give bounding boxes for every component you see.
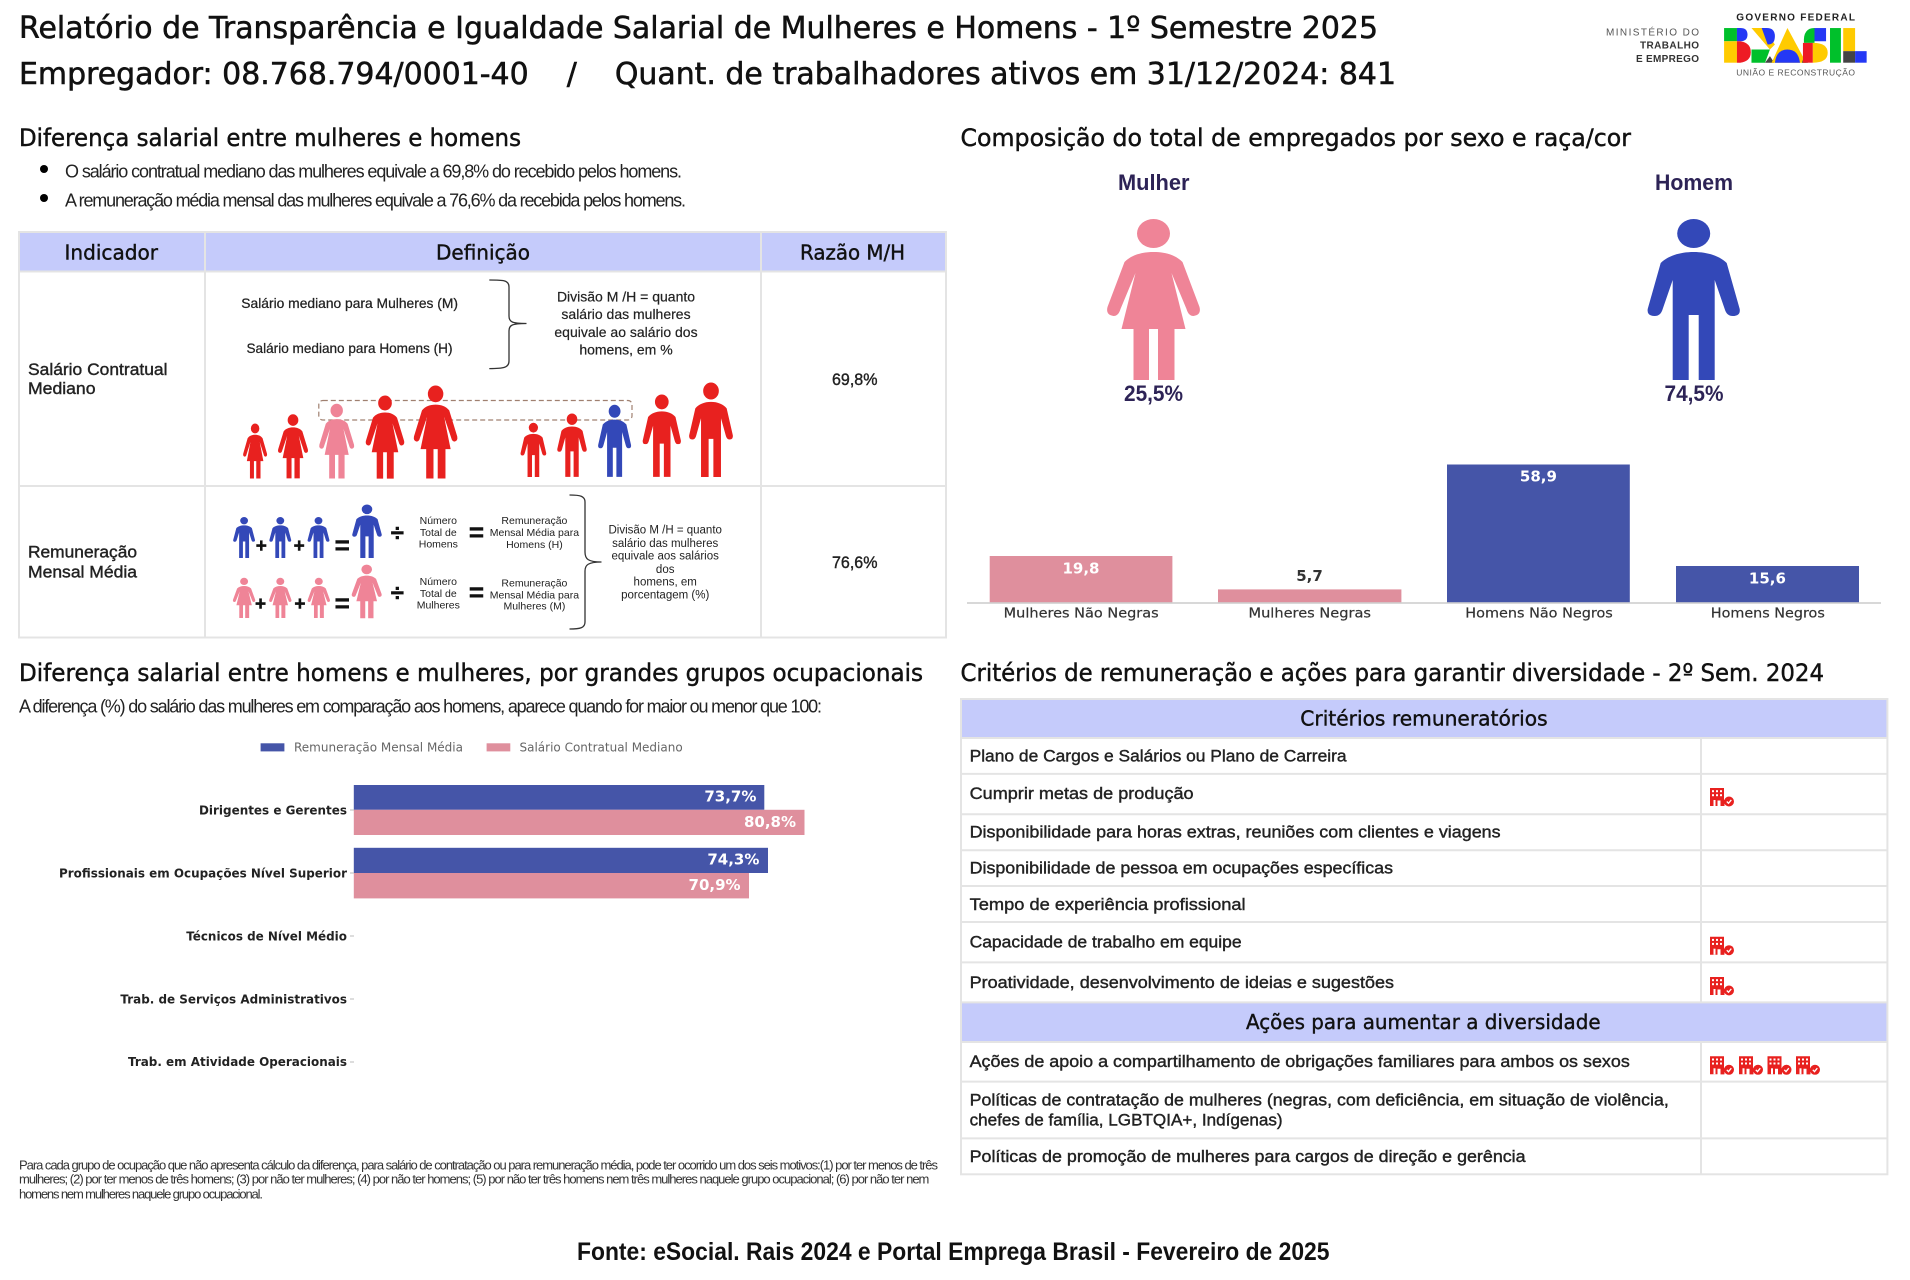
definition: remuneração média homens: ÷ bbox=[391, 520, 404, 547]
definition: remuneração média mulheres: ÷ bbox=[391, 580, 404, 607]
source line: Fonte: eSocial. Rais 2024 e Portal Emprega Brasil - Fevereiro de 2025 bbox=[577, 1238, 1330, 1266]
table header bbox=[64, 240, 905, 264]
row label: Salário Contratual Mediano: Salário Contratual bbox=[28, 360, 168, 379]
bullet list bbox=[40, 162, 686, 210]
bar chart: grupos ocupacionais: Técnicos de Nível Médio bbox=[186, 928, 347, 943]
bar chart: sexo e raça/cor: 19,8 bbox=[1062, 560, 1100, 578]
definition: remuneração média mulheres: dos bbox=[656, 564, 675, 576]
bar chart: sexo e raça/cor: Homens Não Negros bbox=[1465, 606, 1613, 622]
criteria rows: Plano de Cargos e Salários ou Plano de Carreira bbox=[970, 747, 1347, 766]
definition: remuneração média mulheres: salário das mulheres bbox=[612, 538, 719, 550]
pictogram: homem 74,5% bbox=[1648, 170, 1740, 406]
definition: remuneração média homens: Mensal Média para bbox=[490, 527, 579, 539]
action rows: Políticas de promoção de mulheres para cargos de direção e gerência bbox=[970, 1147, 1526, 1166]
bar chart: sexo e raça/cor: 58,9 bbox=[1520, 468, 1557, 486]
action rows: chefes de família, LGBTQIA+, Indígenas) bbox=[970, 1111, 1283, 1130]
definition: remuneração média homens: + bbox=[294, 536, 305, 557]
icons: ações bbox=[1710, 1056, 1820, 1075]
panel: critérios e ações bbox=[960, 0, 1887, 1174]
definition: remuneração média mulheres: Divisão M /H = quanto bbox=[608, 524, 722, 536]
definition: remuneração média mulheres: homens, em bbox=[634, 577, 697, 589]
definition: remuneração média mulheres: Mulheres (M) bbox=[503, 600, 565, 612]
pictogram: mulher 25,5%: Mulher bbox=[1118, 170, 1190, 195]
figures: distribuição mediana bbox=[243, 382, 733, 479]
value: 76,6%: 76,6% bbox=[832, 553, 878, 572]
definition: remuneração média homens: Total de bbox=[420, 527, 457, 539]
bar chart: grupos ocupacionais: 70,9% bbox=[689, 876, 741, 894]
bullet list: O salário contratual mediano das mulheres equivale a 69,8% do recebido pelos homens. bbox=[65, 162, 682, 182]
legend: Salário Contratual Mediano bbox=[520, 740, 683, 754]
definition: salário mediano: Salário mediano para Homens (H) bbox=[246, 340, 452, 356]
definition: salário mediano: Divisão M /H = quanto bbox=[557, 288, 695, 304]
definition: remuneração média homens: Número bbox=[420, 515, 457, 527]
definition: salário mediano bbox=[241, 280, 698, 369]
row label: Remuneração Mensal Média bbox=[28, 542, 138, 582]
panel: diferença salarial bbox=[19, 124, 946, 638]
panel: composição bbox=[960, 124, 1881, 622]
table header: Razão M/H bbox=[800, 240, 905, 264]
definition: remuneração média homens: Homens (H) bbox=[506, 539, 563, 551]
footnote: Para cada grupo de ocupação que não apresenta cálculo da diferença, para salário de contratação ou para remuneração média, pode ter ocorrido um dos seis motivos:(1) por ter menos de três bbox=[19, 1157, 938, 1172]
definition: remuneração média mulheres: Número bbox=[420, 576, 457, 588]
definition: salário mediano: Salário mediano para Mulheres (M) bbox=[241, 295, 458, 311]
definition: remuneração média homens: = bbox=[335, 530, 350, 560]
logo: Governo Federal Brasil bbox=[1724, 12, 1867, 78]
legend: Remuneração Mensal Média bbox=[294, 740, 463, 754]
action rows: Políticas de contratação de mulheres (negras, com deficiência, em situação de violência, bbox=[970, 1091, 1669, 1110]
criteria rows: Capacidade de trabalho em equipe bbox=[970, 932, 1242, 951]
footnote: mulheres; (2) por ter menos de três homens; (3) por não ter mulheres; (4) por não ter homens; (5) por não ter três homens nem três mulheres naquele grupo ocupacional; (6) por não ter nem bbox=[19, 1172, 929, 1187]
definition: remuneração média mulheres bbox=[233, 495, 722, 629]
definition: remuneração média mulheres: Mulheres bbox=[417, 600, 460, 612]
table: critérios remuneratórios e ações bbox=[961, 0, 1887, 1174]
criteria rows: Cumprir metas de produção bbox=[970, 784, 1194, 803]
pictogram: mulher 25,5%: 25,5% bbox=[1124, 381, 1183, 406]
bar chart: grupos ocupacionais: 73,7% bbox=[704, 788, 756, 806]
definition: remuneração média homens: = bbox=[469, 517, 484, 547]
pictogram: mulher 25,5% bbox=[1107, 170, 1200, 406]
header: critérios remuneratórios: Critérios remuneratórios bbox=[1300, 706, 1548, 730]
row label: Remuneração Mensal Média: Mensal Média bbox=[28, 562, 138, 582]
definition: remuneração média mulheres: Remuneração bbox=[501, 578, 568, 590]
row label: Remuneração Mensal Média: Remuneração bbox=[28, 542, 137, 562]
bar chart: grupos ocupacionais: 74,3% bbox=[707, 850, 759, 868]
bar chart: sexo e raça/cor: Mulheres Não Negras bbox=[1004, 606, 1159, 622]
logo: Governo Federal Brasil: UNIÃO E RECONSTRUÇÃO bbox=[1736, 68, 1855, 78]
definition: remuneração média homens: + bbox=[256, 536, 267, 557]
criteria rows: Disponibilidade de pessoa em ocupações específicas bbox=[970, 858, 1393, 878]
logo: Governo Federal Brasil: GOVERNO FEDERAL bbox=[1736, 12, 1855, 24]
title: Relatório de Transparência e Igualdade Salarial de Mulheres e Homens - 1º Semestre 2025 bbox=[19, 11, 1378, 46]
definition: remuneração média mulheres: + bbox=[255, 594, 266, 615]
heading: composição: Composição do total de empregados por sexo e raça/cor bbox=[960, 124, 1631, 152]
heading: diferença salarial: Diferença salarial entre mulheres e homens bbox=[19, 124, 521, 152]
bar chart: sexo e raça/cor bbox=[967, 464, 1881, 622]
bar chart: grupos ocupacionais: Dirigentes e Gerentes bbox=[199, 803, 347, 818]
table: indicadores bbox=[19, 232, 946, 638]
heading: critérios: Critérios de remuneração e ações para garantir diversidade - 2º Sem. 2024 bbox=[960, 659, 1824, 687]
header: ações: Ações para aumentar a diversidade bbox=[1246, 1010, 1601, 1034]
bar chart: sexo e raça/cor: 15,6 bbox=[1749, 570, 1786, 588]
bar chart: grupos ocupacionais: Trab. de Serviços Administrativos bbox=[120, 991, 347, 1006]
footnote bbox=[19, 1157, 938, 1201]
definition: remuneração média mulheres: equivale aos salários bbox=[611, 550, 719, 562]
definition: remuneração média mulheres: Total de bbox=[420, 588, 457, 600]
bullet list: A remuneração média mensal das mulheres equivale a 76,6% da recebida pelos homens. bbox=[65, 190, 686, 210]
logo: Ministério do Trabalho e Emprego bbox=[1606, 25, 1699, 65]
row label: Salário Contratual Mediano: Mediano bbox=[28, 379, 96, 398]
definition: remuneração média mulheres: porcentagem (%) bbox=[621, 590, 709, 602]
title: Empregador: 08.768.794/0001-40 / Quant. de trabalhadores ativos em 31/12/2024: 841 bbox=[19, 57, 1396, 92]
logo: Ministério do Trabalho e Emprego: TRABALHO bbox=[1640, 40, 1699, 52]
value: 69,8%: 69,8% bbox=[832, 370, 878, 389]
footnote: homens nem mulheres naquele grupo ocupacional. bbox=[19, 1186, 263, 1201]
definition: remuneração média homens: Remuneração bbox=[501, 515, 568, 527]
bar chart: grupos ocupacionais: Trab. em Atividade Operacionais bbox=[128, 1054, 347, 1069]
bar chart: sexo e raça/cor: 5,7 bbox=[1296, 567, 1323, 585]
definition: remuneração média homens bbox=[233, 504, 579, 560]
table header: Indicador bbox=[64, 240, 159, 264]
bar chart: sexo e raça/cor: Homens Negros bbox=[1711, 606, 1825, 622]
bar chart: grupos ocupacionais: Profissionais em Ocupações Nível Superior bbox=[59, 866, 348, 881]
definition: remuneração média mulheres: Mensal Média para bbox=[490, 590, 579, 602]
criteria rows: Proatividade, desenvolvimento de ideias e sugestões bbox=[970, 973, 1394, 992]
definition: salário mediano: equivale ao salário dos bbox=[554, 324, 698, 340]
pictogram: homem 74,5%: Homem bbox=[1655, 170, 1733, 195]
action rows bbox=[970, 1052, 1669, 1166]
definition: remuneração média homens: Homens bbox=[419, 539, 458, 551]
panel: grupos ocupacionais bbox=[19, 659, 938, 1201]
bar chart: sexo e raça/cor: Mulheres Negras bbox=[1248, 606, 1371, 622]
definition: remuneração média mulheres: = bbox=[335, 588, 350, 618]
definition: remuneração média mulheres: = bbox=[469, 577, 484, 607]
icons: critérios bbox=[1710, 788, 1734, 996]
criteria rows: Disponibilidade para horas extras, reuniões com clientes e viagens bbox=[970, 823, 1501, 842]
logo: Ministério do Trabalho e Emprego: MINISTÉRIO DO bbox=[1606, 25, 1699, 38]
criteria rows: Tempo de experiência profissional bbox=[970, 895, 1246, 914]
row label: Salário Contratual Mediano bbox=[28, 360, 168, 398]
pictogram: homem 74,5%: 74,5% bbox=[1664, 381, 1724, 406]
criteria rows bbox=[970, 747, 1501, 992]
definition: remuneração média mulheres: + bbox=[294, 594, 305, 615]
logo: Ministério do Trabalho e Emprego: E EMPREGO bbox=[1636, 54, 1699, 65]
action rows: Ações de apoio a compartilhamento de obrigações familiares para ambos os sexos bbox=[970, 1052, 1630, 1071]
heading: grupos ocupacionais: Diferença salarial entre homens e mulheres, por grandes grupos ocupacionais bbox=[19, 659, 923, 687]
title bbox=[19, 11, 1396, 92]
bar chart: grupos ocupacionais bbox=[59, 785, 804, 1069]
bar chart: grupos ocupacionais: 80,8% bbox=[744, 813, 796, 831]
legend bbox=[261, 740, 683, 754]
table header: Definição bbox=[436, 240, 530, 264]
definition: salário mediano: homens, em % bbox=[579, 342, 673, 358]
subtitle: A diferença (%) do salário das mulheres em comparação aos homens, aparece quando for maior ou menor que 100: bbox=[19, 697, 822, 717]
definition: salário mediano: salário das mulheres bbox=[561, 306, 691, 322]
